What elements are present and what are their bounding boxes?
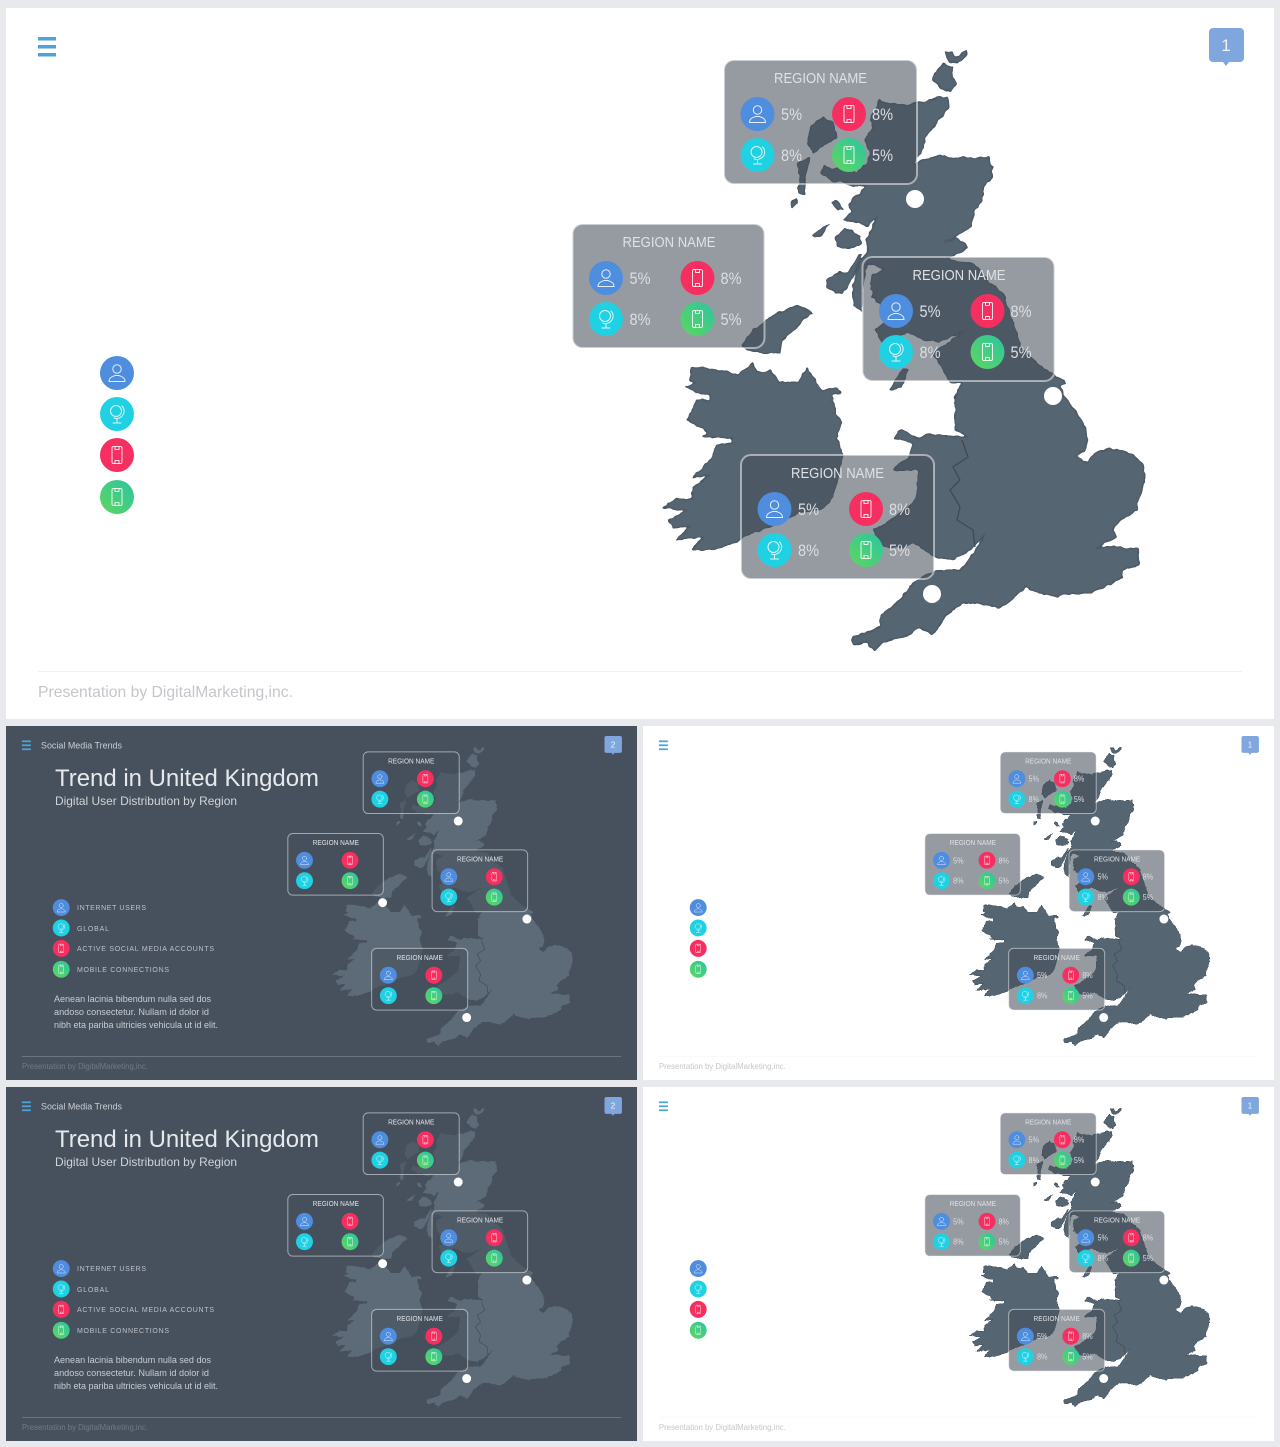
region card west: 5%	[630, 270, 651, 288]
region card north: 8%	[872, 106, 893, 124]
region card south: REGION NAME	[397, 953, 443, 962]
region card east	[1069, 1211, 1165, 1273]
region card east	[1069, 850, 1165, 912]
map: UK and Ireland	[970, 747, 1210, 1046]
region card east: 8%	[1097, 1254, 1108, 1263]
description paragraph	[54, 1355, 218, 1391]
description paragraph: Aenean lacinia bibendum nulla sed dos	[54, 1355, 211, 1365]
panel: large white slide	[6, 8, 1274, 719]
region card west	[288, 1194, 383, 1256]
region card east: 5%	[1097, 1234, 1108, 1243]
footer text: Presentation by DigitalMarketing,inc.	[22, 1423, 148, 1432]
region card west	[925, 833, 1020, 895]
legend labels	[77, 905, 214, 974]
footer text: Presentation by DigitalMarketing,inc.	[22, 1062, 148, 1071]
region card south	[1009, 1309, 1105, 1371]
subtitle: Digital User Distribution by Region	[55, 1155, 237, 1169]
icon: page badge	[1241, 736, 1259, 755]
region card east: REGION NAME	[1094, 854, 1140, 863]
region location dots	[378, 1178, 531, 1383]
region card north	[1000, 1113, 1096, 1175]
legend labels: INTERNET USERS	[77, 905, 146, 912]
legend labels: ACTIVE SOCIAL MEDIA ACCOUNTS	[77, 1307, 214, 1314]
legend labels: GLOBAL	[77, 1287, 109, 1294]
region card west: REGION NAME	[950, 838, 996, 847]
region card east: 8%	[1143, 1234, 1153, 1243]
legend labels: GLOBAL	[77, 926, 109, 933]
region card east	[432, 850, 528, 912]
region card south: 8%	[1082, 1332, 1093, 1341]
region card west	[288, 833, 383, 895]
region card east: 8%	[1143, 873, 1153, 882]
region card east: 8%	[1010, 303, 1032, 321]
region card south: 5%	[1037, 971, 1047, 980]
region card north	[724, 60, 917, 184]
region card north: 5%	[872, 147, 893, 165]
region card south	[372, 1309, 468, 1371]
region card south	[1009, 948, 1105, 1010]
region card north: 8%	[1029, 795, 1039, 804]
legend icons	[690, 899, 707, 978]
region card east: REGION NAME	[457, 854, 503, 863]
region card west: 8%	[998, 856, 1009, 865]
region card west: 5%	[998, 877, 1009, 886]
region card south: REGION NAME	[1034, 953, 1080, 962]
region card west: 5%	[953, 1217, 964, 1226]
scaled slide artwork	[22, 1097, 622, 1407]
region card east: 5%	[1143, 1254, 1153, 1263]
scaled slide artwork	[22, 736, 622, 1046]
description paragraph: nibh eta pariba ultricies vehicula ut id elit.	[54, 1381, 218, 1391]
subtitle: Digital User Distribution by Region	[55, 794, 237, 808]
region card west: REGION NAME	[313, 838, 359, 847]
panel: dark slide top	[6, 726, 637, 1080]
icon: page badge: 1	[1248, 1100, 1253, 1110]
region card north	[1000, 752, 1096, 814]
region card north: 5%	[781, 106, 802, 124]
description paragraph: andoso consectetur. Nullam id dolor id	[54, 1007, 209, 1017]
legend icons	[53, 899, 70, 978]
region card north: 8%	[1029, 1156, 1039, 1165]
region card west: 8%	[720, 270, 742, 288]
map: UK and Ireland	[970, 1108, 1210, 1407]
region card south: 8%	[1037, 1353, 1047, 1362]
region card north: 8%	[1074, 775, 1084, 784]
region card east: 5%	[1097, 873, 1108, 882]
icon: page badge	[1209, 28, 1244, 66]
icon: menu	[38, 37, 56, 56]
panel: white slide bottom	[643, 1087, 1274, 1441]
legend labels: INTERNET USERS	[77, 1266, 146, 1273]
legend labels	[77, 1266, 214, 1335]
legend icons	[690, 1260, 707, 1339]
region card west	[572, 224, 764, 348]
icon: page badge: 1	[1221, 36, 1231, 55]
region card east: 5%	[1143, 893, 1153, 902]
region card south: 8%	[1082, 971, 1093, 980]
legend labels: MOBILE CONNECTIONS	[77, 1328, 169, 1335]
region card north: REGION NAME	[1025, 1117, 1071, 1126]
region card south: 5%	[1082, 1353, 1093, 1362]
legend icons	[53, 1260, 70, 1339]
region card east: REGION NAME	[1094, 1215, 1140, 1224]
region card east: 8%	[1097, 893, 1108, 902]
legend icons	[100, 356, 134, 514]
region card south: 5%	[1082, 992, 1093, 1001]
region card south: REGION NAME	[1034, 1314, 1080, 1323]
region card north: 8%	[781, 147, 802, 165]
region card north: 5%	[1029, 775, 1039, 784]
region card south: 8%	[889, 501, 910, 519]
region card west: 5%	[998, 1238, 1009, 1247]
region location dots	[1015, 817, 1168, 1022]
region card north: REGION NAME	[388, 1117, 434, 1126]
legend labels: MOBILE CONNECTIONS	[77, 967, 169, 974]
region card south: 8%	[1037, 992, 1047, 1001]
region card south: 5%	[1037, 1332, 1047, 1341]
region card east: 8%	[920, 344, 941, 362]
region card north: REGION NAME	[388, 756, 434, 765]
legend labels: ACTIVE SOCIAL MEDIA ACCOUNTS	[77, 946, 214, 953]
region card south: 5%	[798, 501, 819, 519]
region location dots	[378, 817, 531, 1022]
title: Trend in United Kingdom	[55, 765, 319, 792]
description paragraph	[54, 994, 218, 1030]
region card north: REGION NAME	[1025, 756, 1071, 765]
region card south: 8%	[798, 542, 819, 560]
region location dots	[1015, 1178, 1168, 1383]
region card east: REGION NAME	[912, 267, 1006, 284]
icon: page badge: 2	[611, 739, 616, 749]
map: UK and Ireland	[333, 1108, 573, 1407]
region card south	[372, 948, 468, 1010]
footer text: Presentation by DigitalMarketing,inc.	[38, 684, 293, 701]
region card north	[363, 1113, 459, 1175]
header label: Social Media Trends	[41, 1102, 122, 1112]
region card west: REGION NAME	[622, 234, 716, 251]
description paragraph: andoso consectetur. Nullam id dolor id	[54, 1368, 209, 1378]
icon: page badge: 2	[611, 1100, 616, 1110]
region card north: 8%	[1074, 1136, 1084, 1145]
region card west: REGION NAME	[950, 1199, 996, 1208]
region location dots	[754, 190, 1062, 603]
panel: dark slide bottom	[6, 1087, 637, 1441]
region card east: 5%	[1010, 344, 1032, 362]
region card north: 5%	[1074, 795, 1084, 804]
region card north: REGION NAME	[774, 70, 867, 87]
footer text: Presentation by DigitalMarketing,inc.	[659, 1423, 786, 1432]
region card west: 5%	[953, 856, 964, 865]
icon: page badge	[1241, 1097, 1259, 1116]
footer text: Presentation by DigitalMarketing,inc.	[659, 1062, 786, 1071]
region card west: 8%	[630, 311, 651, 329]
region card east: 5%	[920, 303, 941, 321]
region card west: 5%	[720, 311, 742, 329]
scaled slide artwork	[659, 1097, 1259, 1432]
icon: page badge	[604, 1097, 622, 1116]
region card west	[925, 1194, 1020, 1256]
description paragraph: Aenean lacinia bibendum nulla sed dos	[54, 994, 211, 1004]
panel: white slide top	[643, 726, 1274, 1080]
header label: Social Media Trends	[41, 740, 122, 750]
icon: page badge: 1	[1248, 739, 1253, 749]
region card west: 8%	[998, 1217, 1009, 1226]
scaled slide artwork	[659, 736, 1259, 1071]
region card east: REGION NAME	[457, 1215, 503, 1224]
region card west: REGION NAME	[313, 1199, 359, 1208]
description paragraph: nibh eta pariba ultricies vehicula ut id elit.	[54, 1020, 218, 1030]
map: UK and Ireland	[663, 50, 1145, 652]
region card north	[363, 752, 459, 814]
icon: page badge	[604, 736, 622, 755]
map: UK and Ireland	[333, 747, 573, 1046]
region card east	[432, 1211, 528, 1273]
region card north: 5%	[1029, 1136, 1039, 1145]
region card south: REGION NAME	[397, 1314, 443, 1323]
region card east	[862, 257, 1054, 381]
region card south: 5%	[889, 542, 910, 560]
region card west: 8%	[953, 877, 964, 886]
region card north: 5%	[1074, 1156, 1084, 1165]
region card south: REGION NAME	[791, 465, 884, 482]
region card south	[741, 455, 934, 579]
title: Trend in United Kingdom	[55, 1126, 319, 1153]
region card west: 8%	[953, 1238, 964, 1247]
